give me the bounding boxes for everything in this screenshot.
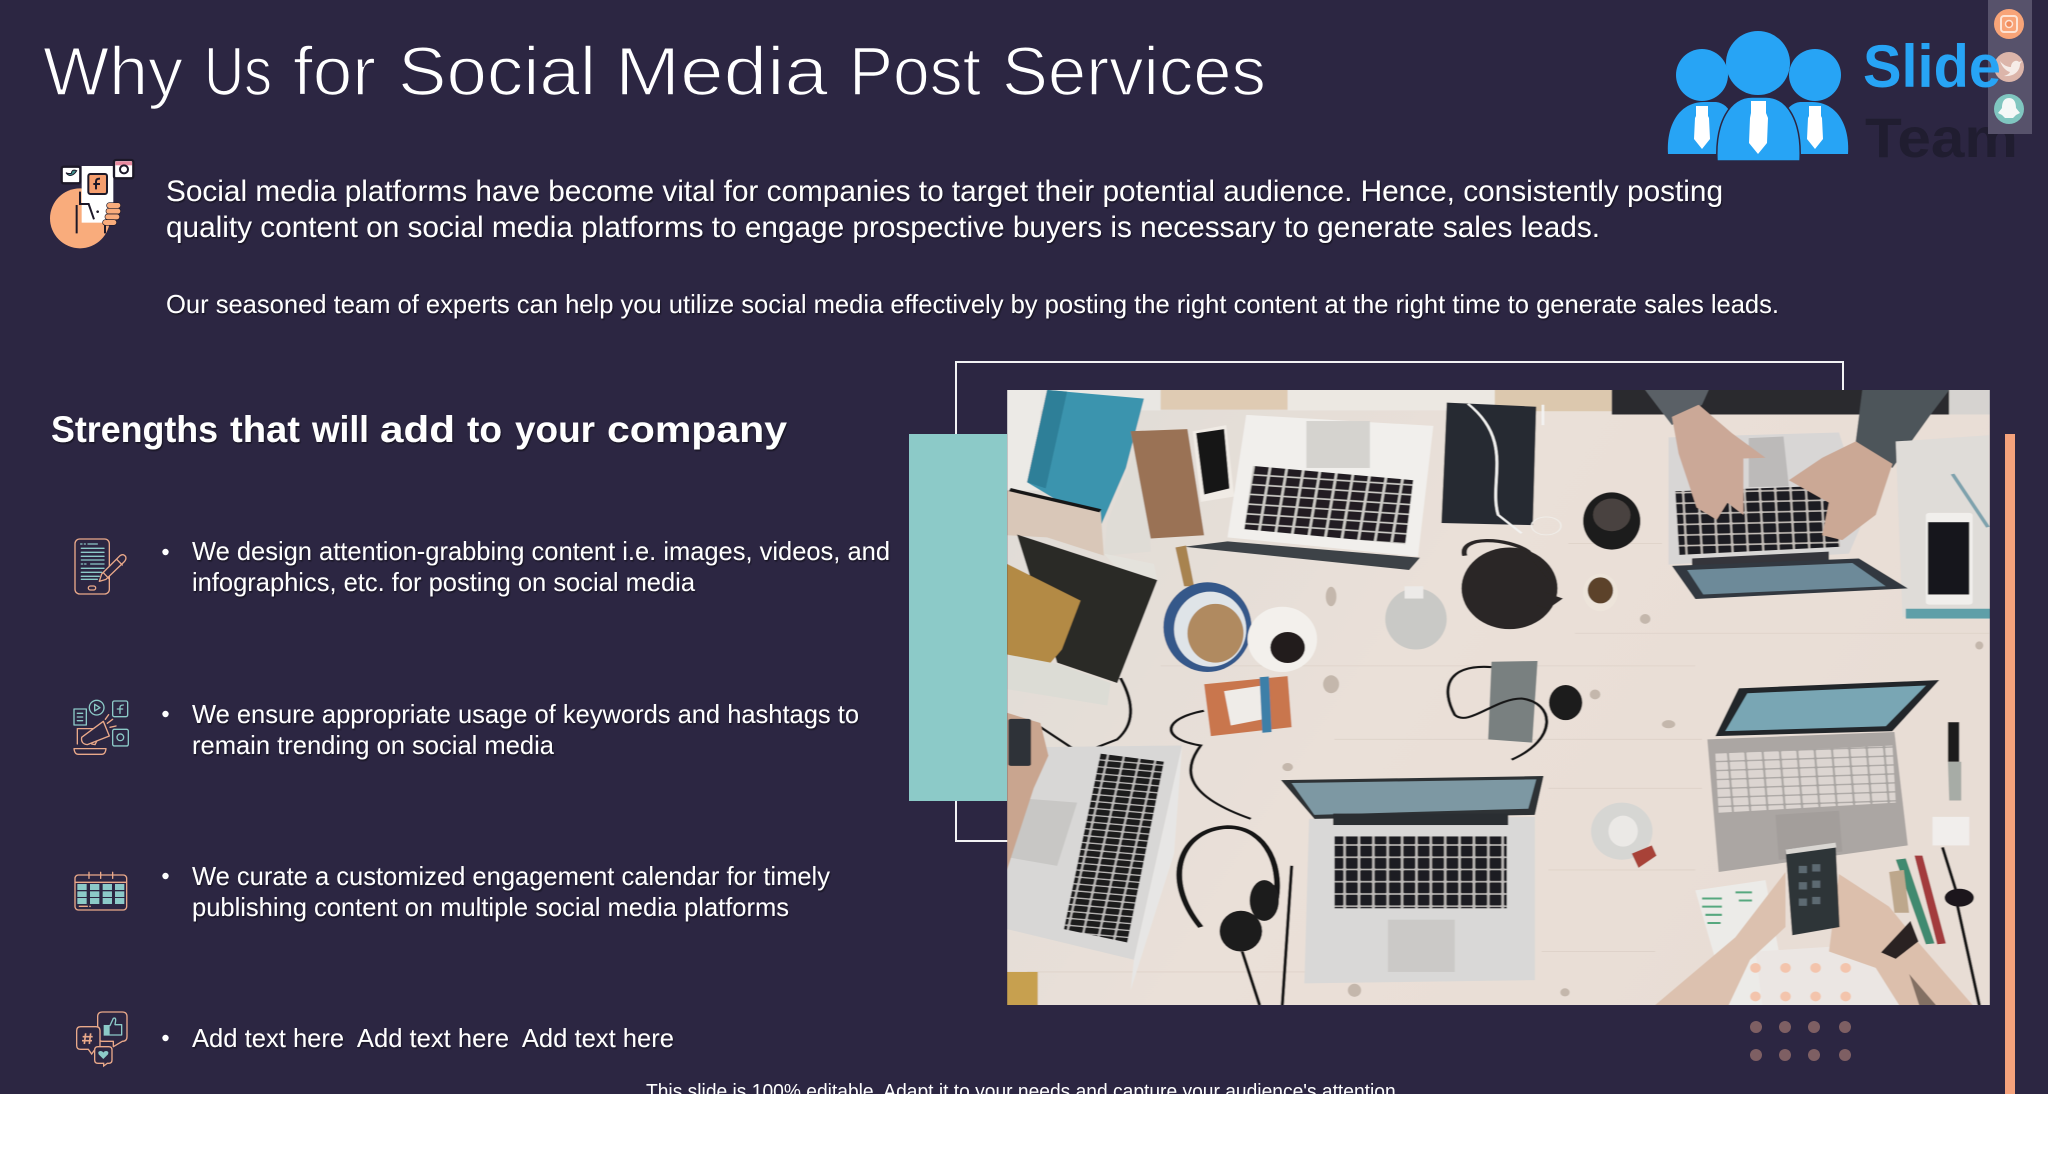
title: Media	[615, 33, 829, 110]
strength text 3: We curate a customized engagement calendar for timely	[192, 861, 830, 891]
strength item 4	[77, 1012, 674, 1066]
section heading: add	[380, 409, 455, 450]
logo: Slide Team	[1668, 0, 2032, 169]
icon: megaphone with social media	[74, 700, 128, 754]
section heading: Strengths	[51, 409, 218, 450]
section heading: your	[515, 409, 595, 450]
strength item 2	[74, 699, 859, 760]
intro paragraph: Social media platforms have become vital for companies to target their potential audience. Hence, consistently posting	[166, 175, 1723, 208]
footer note: This slide is 100% editable. Adapt it to your needs and capture your audience's attention.	[646, 1081, 1401, 1103]
intro paragraph	[166, 175, 1723, 244]
white letterbox below slide	[0, 1094, 2048, 1152]
section heading: will	[311, 409, 369, 450]
decorative dot grid	[1750, 1021, 1851, 1061]
strength text 1: infographics, etc. for posting on social media	[192, 567, 696, 597]
logo word: Slide: Slide	[1863, 33, 2001, 100]
title: Us	[204, 33, 272, 110]
strength text 3	[192, 861, 830, 922]
title: Why	[43, 33, 184, 110]
bullet dot	[162, 711, 169, 717]
logo word: Team: Team	[1865, 106, 2018, 169]
header icon: hand holding phone with social media	[50, 160, 133, 248]
strength text 1: We design attention-grabbing content i.e. images, videos, and	[192, 536, 890, 566]
strength text 2: remain trending on social media	[192, 730, 555, 760]
title: for	[293, 33, 376, 110]
section heading: to	[467, 409, 502, 450]
teal accent block	[909, 434, 1007, 801]
outline frame behind photo	[956, 362, 1843, 841]
intro paragraph: quality content on social media platforms to engage prospective buyers is necessary to generate sales leads.	[166, 211, 1600, 244]
logo people icon	[1668, 31, 1848, 161]
bullet dot	[162, 549, 169, 555]
strength text 2: We ensure appropriate usage of keywords and hashtags to	[192, 699, 859, 729]
team statement: Our seasoned team of experts can help you utilize social media effectively by posting the right content at the right time to generate sales leads.	[166, 289, 1779, 319]
photo: team working with laptops on a wooden table	[1007, 390, 1990, 1005]
strength item 1	[75, 536, 890, 597]
social share sidebar	[1988, 0, 2032, 134]
section heading: that	[230, 409, 300, 450]
bullet dot	[162, 873, 169, 879]
strength text 4: Add text here Add text here Add text here	[192, 1023, 674, 1053]
icon: phone with pencil	[75, 539, 126, 594]
icon: twitter bird	[2000, 61, 2022, 76]
title: Social	[398, 33, 596, 110]
strength text 2	[192, 699, 859, 760]
strength text 3: publishing content on multiple social media platforms	[192, 892, 789, 922]
section heading	[51, 409, 787, 450]
section heading: company	[607, 409, 787, 450]
strength item 3	[75, 861, 830, 922]
title: Services	[1002, 33, 1266, 110]
title	[43, 33, 1266, 110]
bullet dot	[162, 1035, 169, 1041]
title: Post	[849, 33, 981, 110]
icon: speech bubbles with like and hashtag	[77, 1012, 127, 1066]
strength text 1	[192, 536, 890, 597]
icon: calendar	[75, 872, 127, 910]
orange vertical accent bar	[2005, 434, 2015, 1094]
